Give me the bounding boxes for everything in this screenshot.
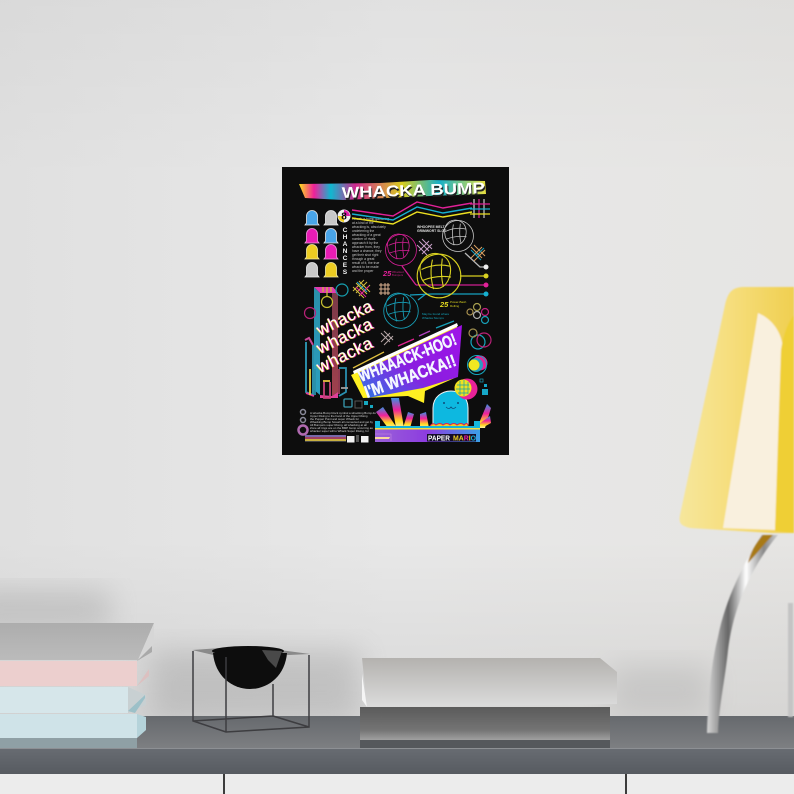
bottom paragraph: whacker super will to Whack Super Rising, for: [310, 429, 369, 433]
grey globe caption: GRIMWORT SLOT: [417, 229, 447, 233]
repeated whacka words: whacka: [314, 296, 377, 340]
intro paragraph: result of it, the true: [352, 261, 379, 265]
multicolor target cluster: [468, 356, 488, 374]
magenta stat: Whacked: [392, 270, 404, 274]
cyan caption: May be found where: [422, 312, 450, 316]
lamp stem: [707, 535, 778, 733]
bottom stripe bar: [305, 435, 346, 442]
cyan caption: Whacka Stumps: [422, 316, 444, 320]
intro paragraph: and the proper: [352, 269, 374, 273]
magenta stat: [382, 269, 404, 278]
lamp: [679, 287, 794, 733]
left book stack: [0, 623, 154, 748]
intro paragraph: whacker from, they: [352, 245, 380, 249]
yellow stat: [439, 300, 467, 309]
small left tower: [305, 338, 314, 396]
zigzag wires: [352, 202, 472, 224]
intro paragraph: [352, 217, 389, 273]
repeated whacka words: whacka: [312, 297, 376, 341]
vertical label chances: [343, 227, 348, 276]
title banner: WHACKA BUMP: [343, 182, 486, 204]
vertical label chances: S: [343, 269, 348, 276]
repeated whacka words: whacka: [313, 296, 376, 340]
white square icons: [347, 435, 368, 442]
yellow stat: 25: [439, 300, 449, 309]
shelf: [0, 716, 794, 774]
brand paper mario: [427, 434, 477, 442]
yellow stat: Rolling: [450, 304, 460, 308]
vertical label chances: H: [343, 234, 348, 241]
poster: [282, 167, 509, 455]
right side wire bus: [402, 210, 489, 300]
repeated whacka words: whacka: [314, 314, 377, 358]
vertical label chances: C: [343, 227, 348, 234]
intro paragraph: whacking is, absolutely: [352, 225, 386, 229]
globe cyan: [384, 293, 418, 328]
tall tower: [314, 287, 338, 398]
speech bubble sign: I'M WHACKA!!: [362, 351, 459, 402]
globe yellow: [417, 253, 461, 298]
bottom paragraph: [310, 411, 376, 433]
speech bubble sign: WHAAACK-HOO!: [356, 330, 459, 386]
intro paragraph: approach it by the: [352, 241, 378, 245]
repeated whacka words: whacka: [313, 314, 376, 358]
bottom paragraph: Zone all rings are on the BMP bump occurring as: [310, 426, 373, 430]
hash knot top right: [470, 199, 490, 218]
intro paragraph: undeterring the: [352, 229, 374, 233]
vertical label chances: C: [343, 255, 348, 262]
whacka ghost character: [430, 391, 468, 428]
bottom paragraph: A whacka Bump block symbol a whacking Bump do: [310, 411, 376, 415]
cabinet fronts: [0, 774, 794, 794]
number 8 badge: [338, 210, 350, 222]
intro paragraph: through a great: [352, 257, 374, 261]
grey globe caption: WHOOPEE MELT: [417, 225, 446, 229]
intro paragraph: get their shot right: [352, 253, 378, 257]
bottom paragraph: the Pupper Point and super Whack for: [310, 417, 359, 421]
intro paragraph: whack to be made: [352, 265, 379, 269]
intro paragraph: number of rivals: [352, 237, 376, 241]
short towers: [310, 368, 348, 398]
bottom left rings: [298, 410, 308, 434]
grey globe caption: [417, 225, 447, 233]
lamp shade: [679, 287, 794, 533]
intro paragraph: have a chance, they: [352, 249, 382, 253]
bottom paragraph: All Bumpers super Rising, all whacking at all: [310, 423, 367, 427]
magenta stat: 25: [382, 269, 392, 278]
sign post: [391, 398, 404, 428]
bottom paragraph: Whacking Bump Smash all connected and get by: [310, 420, 374, 424]
repeated whacka words: whacka: [313, 333, 376, 377]
small square icons: [344, 379, 488, 408]
repeated whacka words: [312, 296, 377, 378]
brand paper mario: MARIO: [453, 436, 477, 442]
number 8 badge: 8: [341, 212, 347, 222]
rainbow sticks: [376, 404, 491, 428]
intro paragraph: whacking of a great: [352, 233, 381, 237]
knot icons: [353, 239, 485, 345]
vertical label chances: E: [343, 262, 348, 269]
ring clusters right: [467, 304, 491, 349]
yellow stat: Power-Bash: [450, 300, 467, 304]
repeated whacka words: whacka: [312, 315, 376, 359]
intro paragraph: Whack-a-bump gathering: [352, 217, 389, 221]
black bowl in wire frame: [192, 646, 310, 732]
pedestal base: [375, 421, 480, 442]
repeated whacka words: whacka: [314, 333, 377, 377]
magenta stat: Bumpers: [392, 273, 404, 277]
dashed color strokes above sign: [353, 321, 454, 368]
repeated whacka words: whacka: [312, 334, 376, 378]
speech bubble sign: [351, 323, 462, 403]
bottom paragraph: Upper Rising to the hand of the Upper Rising: [310, 414, 368, 418]
brand paper mario: PAPER: [428, 436, 450, 442]
intro paragraph: at a kind of the: [352, 221, 374, 225]
ghost icons grid: [305, 210, 338, 277]
globe magenta: [386, 234, 416, 265]
towers: [304, 284, 348, 398]
cyan caption: [422, 312, 450, 320]
title banner: [299, 180, 486, 204]
stacked books center: [360, 658, 617, 748]
globe grey: [443, 220, 473, 251]
vertical label chances: A: [343, 241, 348, 248]
title banner: WHACKA BUMP: [342, 180, 485, 202]
small globe on ghost: [454, 378, 478, 400]
tower hanging rings: [304, 284, 348, 318]
vertical label chances: N: [343, 248, 348, 255]
